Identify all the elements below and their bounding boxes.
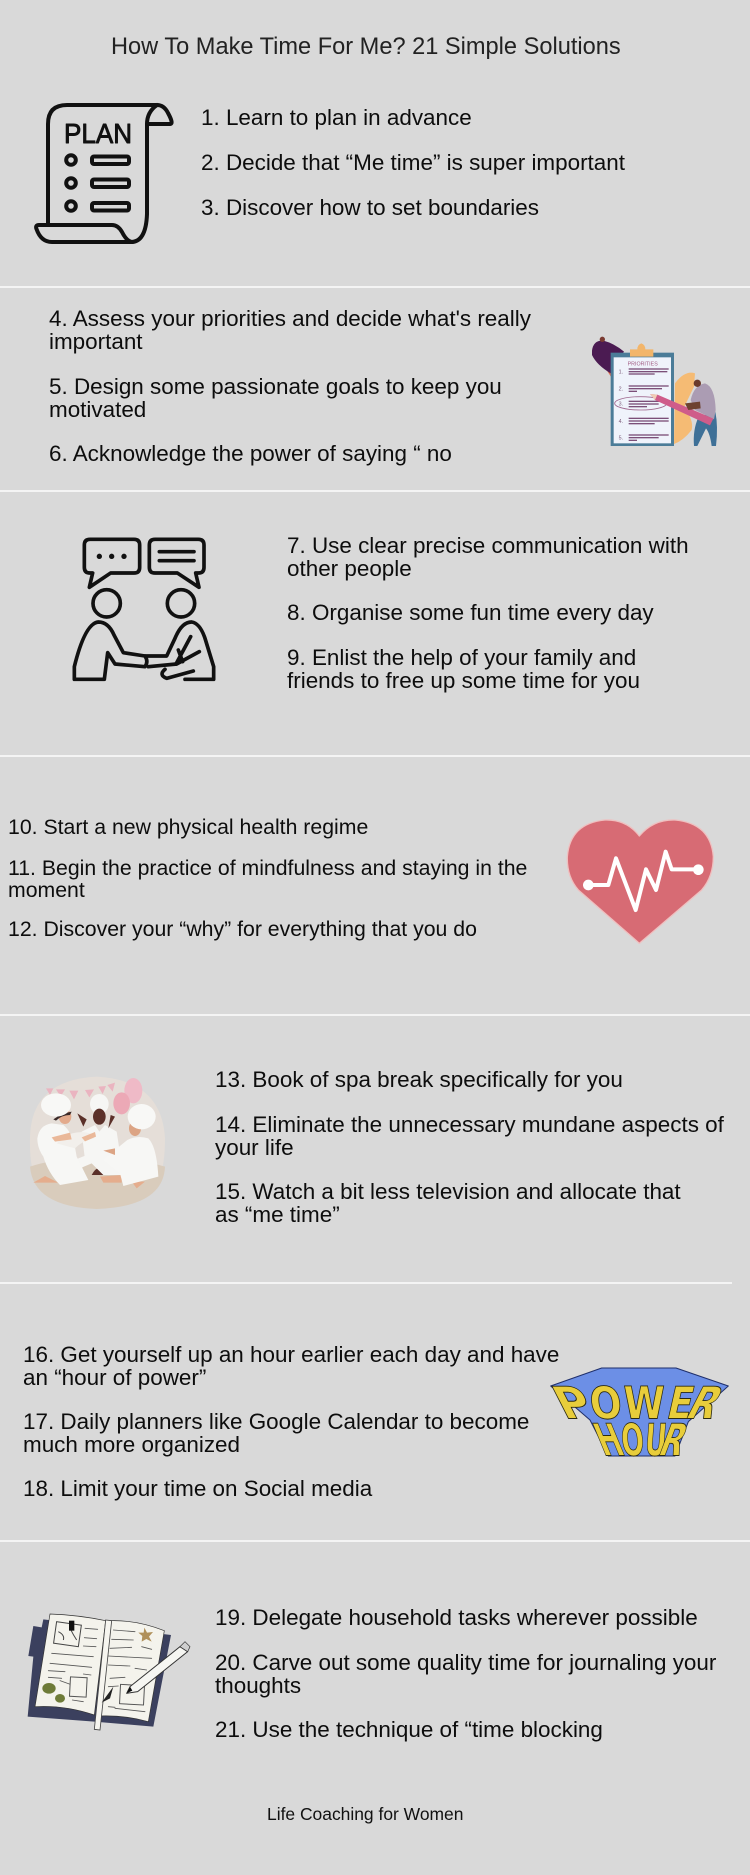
- item 12: 12. Discover your “why” for everything that you do: [8, 917, 477, 941]
- item 18: 18. Limit your time on Social media: [23, 1476, 372, 1501]
- item 16: 16. Get yourself up an hour earlier each day and have: [23, 1342, 559, 1367]
- icon: plan scroll: PLAN: [64, 118, 132, 149]
- item 8: 8. Organise some fun time every day: [287, 600, 654, 625]
- icon: power hour badge: [544, 1368, 732, 1467]
- item 11: 11. Begin the practice of mindfulness and staying in the: [8, 856, 527, 880]
- item 17: much more organized: [23, 1432, 240, 1457]
- item 9: friends to free up some time for you: [287, 668, 640, 693]
- item 5: motivated: [49, 397, 146, 422]
- item 21: 21. Use the technique of “time blocking: [215, 1717, 603, 1742]
- footer: Life Coaching for Women: [267, 1804, 463, 1824]
- icon: priorities clipboard: 1.: [619, 369, 623, 375]
- item 15: [215, 1179, 681, 1227]
- item 16: [23, 1342, 559, 1390]
- icon: power hour badge: O: [587, 1378, 625, 1429]
- icon: power hour badge: R: [678, 1378, 732, 1430]
- icon: priorities clipboard: PRIORITIES: [628, 361, 658, 367]
- item 4: important: [49, 329, 143, 354]
- icon: priorities clipboard: 5.: [619, 435, 623, 441]
- item 10: 10. Start a new physical health regime: [8, 815, 368, 839]
- item 14: your life: [215, 1135, 294, 1160]
- item 4: [49, 306, 531, 354]
- icon: power hour badge: P: [544, 1378, 603, 1430]
- item 2: 2. Decide that “Me time” is super important: [201, 150, 625, 175]
- item 13: 13. Book of spa break specifically for you: [215, 1067, 623, 1092]
- item 7: other people: [287, 556, 412, 581]
- icon: open journal with pen: [28, 1614, 190, 1730]
- item 15: as “me time”: [215, 1202, 340, 1227]
- icon: spa friends: [30, 1076, 165, 1209]
- item 14: [215, 1112, 724, 1160]
- icon: power hour badge: H: [587, 1415, 632, 1467]
- icon: two people talking: [72, 538, 216, 682]
- item 7: 7. Use clear precise communication with: [287, 533, 689, 558]
- item 7: [287, 533, 689, 581]
- item 9: [287, 645, 640, 693]
- item 4: 4. Assess your priorities and decide what's really: [49, 306, 531, 331]
- item 16: an “hour of power”: [23, 1365, 206, 1390]
- item 1: 1. Learn to plan in advance: [201, 105, 472, 130]
- item 6: 6. Acknowledge the power of saying “ no: [49, 441, 452, 466]
- item 3: 3. Discover how to set boundaries: [201, 195, 539, 220]
- icon: power hour badge: R: [652, 1415, 695, 1467]
- item 14: 14. Eliminate the unnecessary mundane aspects of: [215, 1112, 724, 1137]
- item 17: [23, 1409, 529, 1457]
- title: How To Make Time For Me? 21 Simple Solutions: [111, 34, 621, 60]
- icon: plan scroll: [34, 102, 174, 244]
- item 19: 19. Delegate household tasks wherever possible: [215, 1605, 698, 1630]
- icon: priorities clipboard: 4.: [619, 419, 623, 425]
- icon: power hour badge: E: [663, 1378, 699, 1429]
- item 5: [49, 374, 502, 422]
- item 11: [8, 856, 527, 902]
- item 5: 5. Design some passionate goals to keep you: [49, 374, 502, 399]
- item 20: thoughts: [215, 1673, 301, 1698]
- icon: priorities clipboard: 2.: [619, 386, 623, 392]
- item 20: [215, 1650, 716, 1698]
- item 20: 20. Carve out some quality time for journaling your: [215, 1650, 716, 1675]
- icon: heart with pulse: [566, 819, 714, 944]
- icon: power hour badge: O: [619, 1415, 646, 1467]
- item 15: 15. Watch a bit less television and allocate that: [215, 1179, 681, 1204]
- item 17: 17. Daily planners like Google Calendar to become: [23, 1409, 529, 1434]
- icon: priorities clipboard: [592, 336, 717, 446]
- icon: power hour badge: U: [643, 1415, 669, 1467]
- item 11: moment: [8, 878, 85, 902]
- icon: power hour badge: W: [623, 1378, 665, 1429]
- item 9: 9. Enlist the help of your family and: [287, 645, 636, 670]
- icon: priorities clipboard: 3.: [619, 402, 623, 408]
